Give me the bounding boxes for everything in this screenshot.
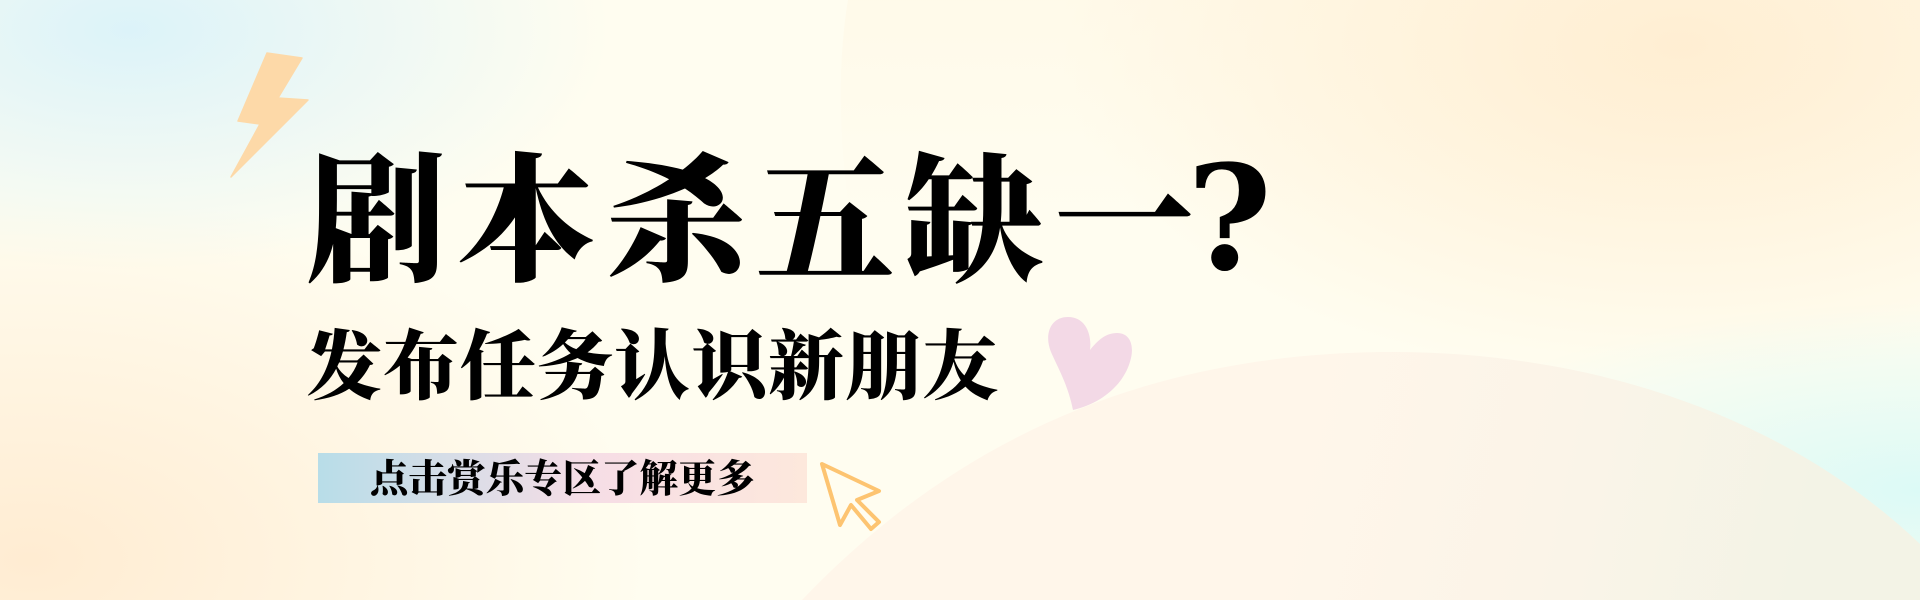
title: ?: [1187, 134, 1272, 304]
button label: 点击赏乐专区了解更多: [370, 459, 755, 501]
title: 剧本杀五缺一: [307, 147, 1204, 301]
subtitle: 发布任务认识新朋友: [306, 326, 999, 410]
button: [318, 453, 807, 503]
